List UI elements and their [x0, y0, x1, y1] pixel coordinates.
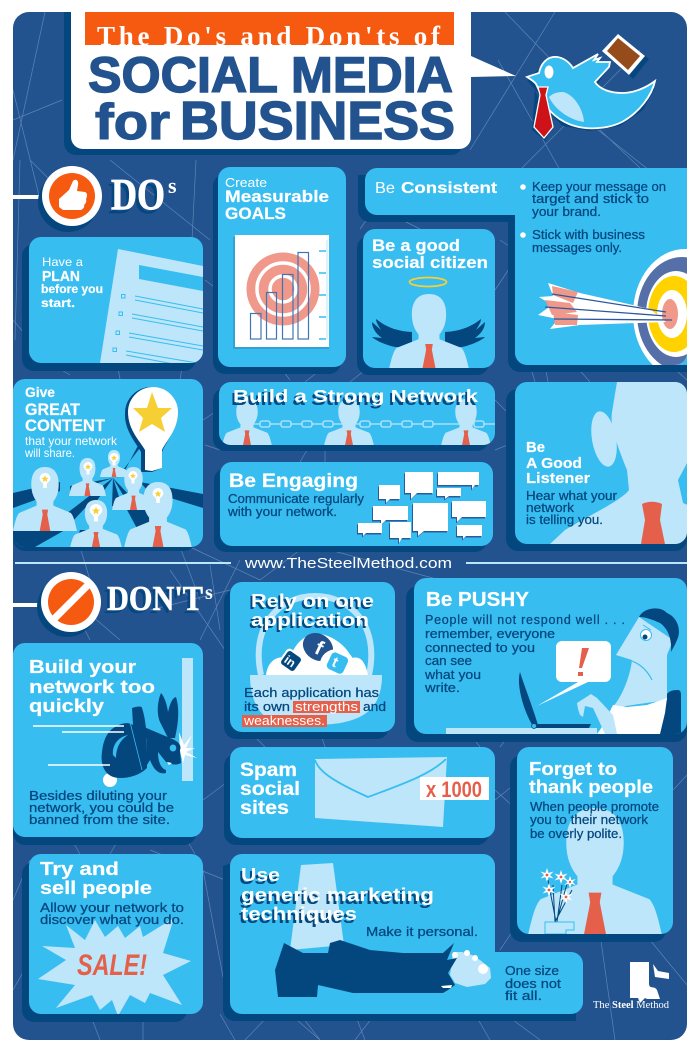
icon: facebook: f	[311, 637, 327, 660]
panel: good listener	[506, 382, 690, 551]
icon: large light bulb	[125, 387, 178, 472]
illustration: basket of eggs	[250, 596, 382, 725]
text: listener: Listener	[526, 470, 590, 487]
illustration: idea network	[13, 387, 203, 548]
text: try body: Allow your network to	[40, 901, 184, 915]
heading: network: Build a Strong Network	[231, 389, 476, 409]
text: forget body: be overly polite.	[530, 827, 622, 841]
icon: linkedin: in	[281, 653, 298, 670]
icon: prohibition bar	[52, 582, 91, 621]
heading: too quickly	[29, 657, 155, 716]
text: engaging body	[227, 492, 365, 519]
logo: The Steel Method: The Steel Method	[593, 999, 669, 1011]
illustration: person holding flowers	[528, 808, 662, 935]
logo: The Steel Method	[593, 962, 669, 1011]
text: goals heading: Measurable	[225, 188, 329, 206]
bullet list: messages only.	[532, 241, 622, 255]
heading: be pushy: Be PUSHY	[426, 589, 530, 611]
panel: build network too quickly	[13, 643, 203, 845]
heading: generic marketing: techniques	[241, 904, 357, 924]
heading: generic marketing: generic marketing	[241, 885, 434, 905]
heading: rely: Rely on one	[249, 593, 372, 613]
text: forget body	[530, 800, 659, 841]
illustration: listener silhouette	[550, 382, 690, 544]
speech bubbles	[357, 472, 486, 544]
text: goals heading: Create	[225, 176, 267, 190]
section header: DON'Ts: s	[205, 582, 213, 604]
illustration: sale starburst	[38, 918, 191, 1016]
text: great content: will share.	[24, 446, 75, 460]
panel: rely on one application	[224, 582, 395, 739]
heading: forget	[529, 759, 653, 797]
text: too quickly body: network, you could be	[29, 801, 174, 815]
section header: DON'Ts: DON'T	[107, 579, 203, 618]
text: have a plan: before you	[41, 282, 103, 296]
heading: try	[40, 859, 152, 898]
section header: DON'Ts: DON'T	[104, 582, 200, 621]
text: listener: network	[526, 501, 575, 515]
heading: be consistent: Consistent	[401, 180, 498, 197]
bullet list: your brand.	[532, 205, 601, 219]
section header: DOs: s	[168, 173, 177, 198]
bullet list	[520, 180, 666, 255]
subtitle band	[85, 12, 454, 45]
text: rely body: its own	[244, 700, 290, 714]
heading: rely	[249, 591, 374, 632]
text: great content	[24, 384, 118, 460]
illustration: people linked by chain	[222, 399, 495, 446]
heading: generic marketing: generic marketing	[239, 888, 432, 908]
heading: network	[231, 386, 478, 409]
heading: engaging: Be Engaging	[229, 471, 358, 492]
text: pushy body: remember, everyone	[425, 627, 555, 641]
text: rely body: weaknesses.	[243, 714, 325, 728]
heading: spam	[240, 760, 300, 819]
bullet list: target and stick to	[532, 192, 649, 206]
text: rely body	[242, 686, 386, 728]
heading: too quickly: quickly	[29, 696, 104, 716]
title line 2: for	[95, 94, 170, 150]
text: one size	[505, 964, 562, 1003]
title line 1: SOCIAL MEDIA	[88, 47, 453, 103]
text: listener: Be	[526, 439, 545, 456]
heading: forget: Forget to	[529, 759, 617, 779]
heading: citizen: social citizen	[372, 253, 488, 272]
panel: be engaging	[214, 462, 493, 552]
illustration: shoe stepping on hand	[275, 863, 491, 997]
title banner	[64, 12, 516, 155]
heading: try: Try and	[40, 859, 119, 879]
text: too quickly body	[29, 789, 174, 827]
heading: spam: Spam	[240, 760, 297, 781]
text: listener	[526, 439, 617, 527]
people with small bulbs	[13, 450, 192, 548]
chart: target with bars	[233, 235, 329, 349]
text: one size: One size	[505, 964, 559, 978]
text: rely body: and	[363, 700, 386, 714]
text: listener: A Good	[526, 455, 582, 472]
text: goals heading	[225, 176, 329, 223]
panel: measurable goals	[213, 167, 346, 374]
heading: too quickly: Build your	[29, 657, 136, 677]
illustration: sale starburst: SALE!	[77, 949, 147, 982]
illustration: arrows hitting target	[538, 249, 687, 365]
text: try body: discover what you do.	[40, 913, 184, 927]
text: great content: that your network	[25, 434, 118, 448]
panel: great content	[13, 379, 203, 551]
text: try body	[40, 901, 184, 927]
section header: DOs	[13, 166, 177, 232]
panel: generic marketing	[223, 854, 583, 1021]
text: one size: fit all.	[505, 989, 542, 1003]
divider with website: www.TheSteelMethod.com	[244, 556, 452, 572]
icon: thumbs up	[59, 180, 87, 210]
icon: twitter bird with tie and briefcase	[527, 34, 655, 141]
panel: be consistent	[358, 168, 700, 379]
illustration: man at laptop	[446, 608, 681, 734]
text: pushy body: People will not respond well . . .	[425, 613, 625, 627]
text: have a plan	[41, 255, 103, 310]
text: pushy body: what you	[424, 668, 481, 682]
text: pushy body: can see	[425, 654, 472, 668]
heading: citizen	[372, 236, 488, 272]
heading: generic marketing: Use	[239, 868, 278, 888]
text: make it personal: Make it personal.	[366, 925, 478, 939]
heading: generic marketing: techniques	[239, 907, 355, 927]
panel: good social citizen	[357, 229, 495, 375]
text: listener: is telling you.	[526, 513, 603, 527]
heading: try: sell people	[40, 878, 152, 898]
heading: too quickly: network too	[29, 677, 155, 697]
panel: try and sell people	[22, 854, 203, 1022]
section header: DON'Ts	[13, 572, 213, 637]
text: pushy body: connected to you	[425, 641, 535, 655]
illustration: plan document	[100, 249, 203, 369]
text: too quickly body: Besides diluting your	[29, 789, 167, 803]
text: forget body: When people promote	[530, 800, 659, 814]
heading: rely: Rely on one	[251, 591, 374, 611]
panel: forget to thank people	[510, 747, 673, 942]
panel: strong network	[213, 382, 495, 451]
text: have a plan: start.	[41, 296, 75, 310]
heading: spam: sites	[240, 798, 289, 819]
heading: forget: thank people	[529, 777, 653, 797]
text: engaging body: Communicate regularly	[228, 492, 365, 506]
text: pushy body	[424, 613, 625, 695]
text: pushy body: write.	[424, 681, 460, 695]
illustration: rabbit hitting wall	[33, 658, 197, 787]
section header: DOs: DO	[108, 174, 162, 223]
illustration: envelope	[315, 757, 447, 827]
panel: be pushy	[406, 578, 687, 742]
bullet list: Stick with business	[532, 228, 645, 242]
heading: be consistent: Be	[375, 180, 395, 197]
text: goals heading: GOALS	[225, 205, 286, 223]
bullet list: Keep your message on	[532, 180, 666, 194]
panel: spam social sites	[224, 747, 495, 845]
text: rely body: strengths	[295, 700, 358, 714]
heading: citizen: Be a good	[372, 236, 460, 255]
label: x 1000: x 1000	[426, 777, 482, 802]
heading: be consistent	[375, 180, 498, 197]
text: listener: Hear what your	[526, 489, 617, 503]
text: one size: does not	[505, 977, 562, 991]
text: have a plan: Have a	[42, 255, 83, 269]
heading: spam: social	[240, 779, 300, 800]
text: forget body: you to their network	[530, 813, 649, 827]
text: great content: CONTENT	[25, 416, 106, 435]
heading: generic marketing	[239, 865, 434, 927]
heading: generic marketing: Use	[241, 865, 280, 885]
text: engaging body: with your network.	[227, 505, 337, 519]
heading: network: Build a Strong Network	[233, 386, 478, 406]
title line 2: BUSINESS	[180, 91, 455, 151]
heading: rely: application	[251, 610, 369, 630]
subtitle band: The Do's and Don'ts of	[97, 21, 441, 51]
section header: DOs: DO	[111, 170, 165, 219]
text: too quickly body: banned from the site.	[29, 813, 170, 827]
icon: twitter: t	[329, 654, 341, 671]
text: great content: GREAT	[25, 400, 81, 419]
text: rely body: Each application has	[244, 686, 379, 700]
illustration: person with halo and wings	[372, 278, 485, 369]
panel: have a plan	[22, 237, 203, 371]
text: have a plan: PLAN	[42, 268, 80, 285]
text: great content: Give	[25, 384, 55, 400]
heading: rely: application	[249, 612, 367, 632]
